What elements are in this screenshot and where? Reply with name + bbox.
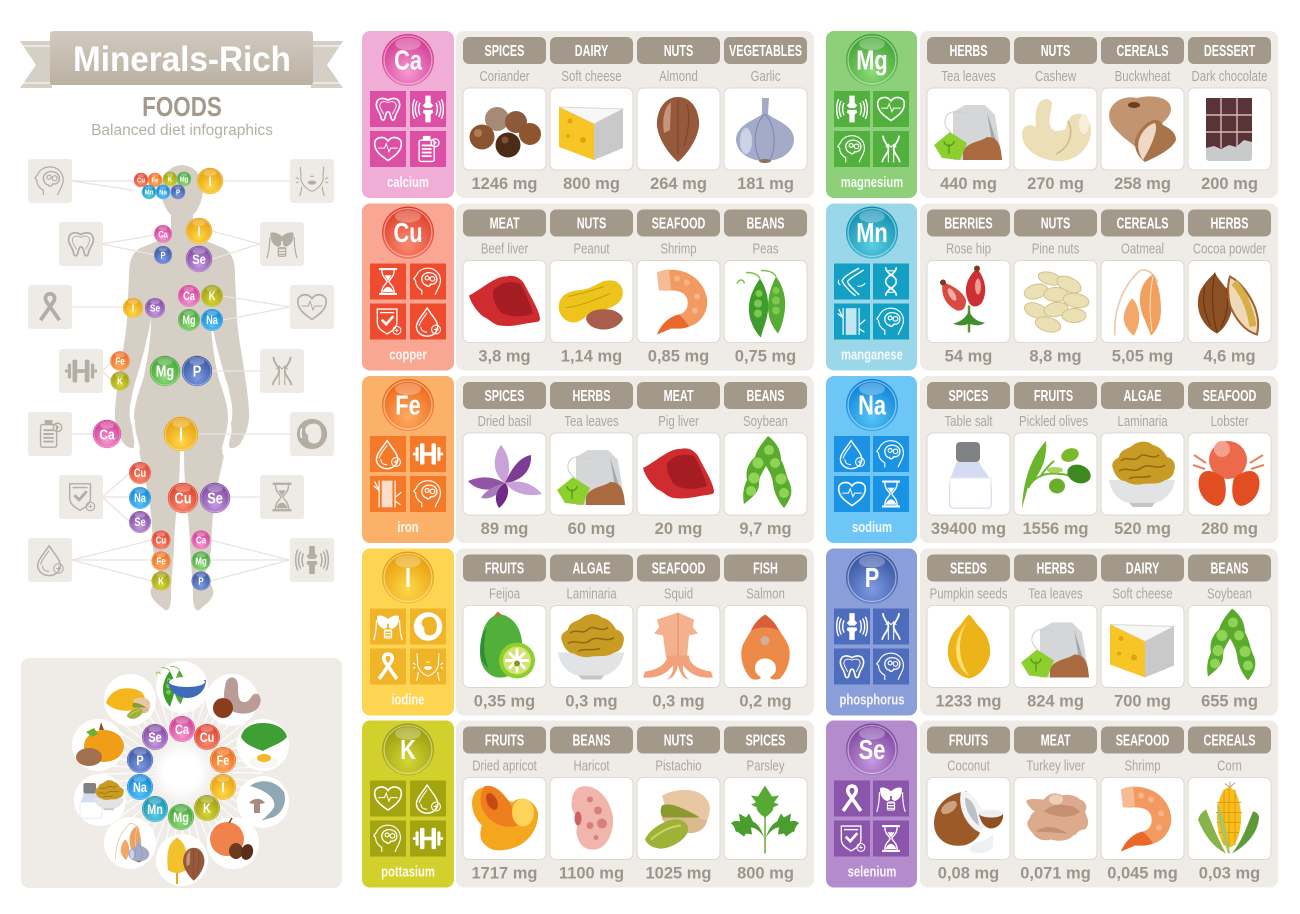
panel: potassium foods: 800 mg — [737, 864, 794, 882]
connector lines — [72, 181, 290, 581]
panel: food wheel — [21, 658, 342, 888]
panel: copper foods: SEAFOOD — [652, 214, 706, 232]
mineral balls on body: Mg — [180, 176, 188, 184]
tile: sodium: sodium — [852, 518, 892, 535]
panel: selenium foods: 0,03 mg — [1199, 864, 1260, 882]
panel: phosphorus foods: 824 mg — [1027, 692, 1084, 710]
panel: iodine foods: 0,3 mg — [565, 692, 618, 710]
wheel foods: salt and laminaria — [80, 780, 124, 819]
panel: calcium foods: 264 mg — [650, 175, 707, 193]
mineral balls on body: Cu — [134, 468, 146, 480]
panel: iron foods: 9,7 mg — [739, 520, 792, 538]
tile: potassium: K — [400, 736, 416, 766]
panel: sodium foods: SPICES — [949, 387, 988, 405]
mineral balls on body: Fe — [156, 556, 166, 567]
mineral balls on body: Se — [207, 490, 223, 508]
panel: sodium foods: 280 mg — [1201, 520, 1258, 538]
mineral balls on body: P — [176, 189, 180, 197]
panel: sodium foods: SEAFOOD — [1203, 387, 1257, 405]
mineral balls on body: Mg — [182, 315, 196, 327]
wheel minerals: Cu — [200, 730, 214, 745]
panel: potassium foods: Parsley — [747, 757, 785, 774]
panel: selenium foods: SEAFOOD — [1116, 731, 1170, 749]
panel: potassium foods: BEANS — [572, 731, 611, 749]
panel: potassium foods: 1100 mg — [559, 864, 624, 882]
panel: sodium foods: Lobster — [1211, 412, 1249, 429]
benefit icons around body — [28, 159, 334, 582]
panel: calcium foods: 1246 mg — [471, 175, 538, 193]
wheel foods: cheese and pistachio — [106, 688, 150, 719]
wheel minerals: Mn — [147, 802, 163, 817]
panel: calcium foods: NUTS — [664, 42, 693, 60]
mineral balls on body: Mg — [195, 556, 207, 567]
tile: iodine — [362, 548, 454, 716]
tile: sodium: Na — [858, 391, 886, 421]
panel: manganese foods: BERRIES — [944, 214, 993, 232]
mineral balls on body: Fe — [115, 356, 125, 367]
tile: potassium: pottasium — [381, 863, 435, 880]
panel: selenium foods: Shrimp — [1124, 757, 1161, 774]
mineral balls on body: Na — [159, 189, 167, 197]
body silhouette — [115, 165, 249, 610]
panel: iodine foods: FRUITS — [485, 559, 524, 577]
panel: magnesium foods: HERBS — [949, 42, 988, 60]
panel: phosphorus foods — [920, 548, 1278, 716]
panel: calcium foods: Coriander — [480, 67, 530, 84]
mineral balls on body: K — [209, 291, 216, 303]
wheel minerals: P — [136, 753, 144, 768]
wheel foods: peach and coffee — [210, 818, 255, 861]
panel: manganese foods: 5,05 mg — [1112, 348, 1173, 366]
tile: potassium — [362, 720, 454, 888]
panel: calcium foods: VEGETABLES — [729, 42, 802, 60]
panel: magnesium foods: Tea leaves — [941, 67, 996, 84]
panel: phosphorus foods: 700 mg — [1114, 692, 1171, 710]
mineral balls on body: Na — [206, 315, 218, 327]
panel: copper foods: 0,75 mg — [735, 348, 796, 366]
heading: foods: FOODS — [142, 92, 222, 123]
mineral balls on body: Se — [150, 303, 160, 315]
mineral balls on body: Fe — [152, 177, 159, 185]
wheel minerals: K — [203, 801, 211, 816]
tile: calcium: Ca — [394, 46, 422, 76]
panel: iron foods: 60 mg — [568, 520, 615, 538]
mineral balls on body: K — [158, 576, 164, 587]
tile: iron: iron — [397, 518, 419, 535]
panel: selenium foods: Coconut — [947, 757, 990, 774]
panel: copper foods: Shrimp — [660, 240, 697, 257]
panel: magnesium foods: 270 mg — [1027, 175, 1084, 193]
panel: copper foods: 1,14 mg — [561, 348, 622, 366]
mineral balls on body: Ca — [196, 535, 207, 546]
panel: manganese foods: 54 mg — [945, 348, 992, 366]
tile: copper: Cu — [393, 219, 423, 249]
wheel foods: pumpkin and walnut — [76, 722, 124, 766]
wheel minerals: Mg — [173, 810, 189, 825]
panel: phosphorus foods: SEEDS — [950, 559, 987, 577]
panel: iodine foods: FISH — [753, 559, 778, 577]
wheel minerals: Se — [148, 730, 162, 745]
panel: copper foods: 3,8 mg — [478, 348, 531, 366]
panel: potassium foods: Haricot — [573, 757, 610, 774]
wheel minerals: I — [221, 780, 225, 795]
mineral balls on body — [93, 168, 230, 591]
tile: selenium: selenium — [848, 863, 896, 880]
panel: magnesium foods: Buckwheat — [1115, 67, 1171, 84]
panel: calcium foods: Garlic — [751, 67, 781, 84]
panel: copper foods: MEAT — [490, 214, 520, 232]
panel: iodine foods: Feijoa — [489, 585, 521, 602]
tile: magnesium — [826, 31, 917, 198]
wheel foods: peas and rice — [156, 666, 206, 707]
panel: manganese foods: Cocoa powder — [1193, 240, 1267, 257]
panel: potassium foods — [456, 720, 814, 888]
panel: iodine foods — [456, 548, 814, 716]
panel: iodine foods: SEAFOOD — [652, 559, 706, 577]
panel: iodine foods: Salmon — [746, 585, 785, 602]
panel: potassium foods: Dried apricot — [472, 757, 537, 774]
panel: potassium foods: FRUITS — [485, 731, 524, 749]
panel: iodine foods: Squid — [664, 585, 693, 602]
tile: manganese: Mn — [856, 219, 888, 249]
panel: iron foods: MEAT — [664, 387, 694, 405]
panel: copper foods: Peas — [753, 240, 779, 257]
tile: calcium — [362, 31, 454, 198]
tile: iron: Fe — [395, 391, 421, 421]
panel: iron foods: Soybean — [743, 412, 788, 429]
tile: phosphorus: P — [865, 564, 879, 594]
panel: phosphorus foods: Soft cheese — [1112, 585, 1173, 602]
panel: phosphorus foods: 1233 mg — [935, 692, 1002, 710]
panel: iodine foods: ALGAE — [572, 559, 611, 577]
panel: manganese foods: NUTS — [1041, 214, 1070, 232]
panel: manganese foods: 4,6 mg — [1203, 348, 1256, 366]
panel: manganese foods: Oatmeal — [1121, 240, 1164, 257]
tile: sodium — [826, 376, 917, 543]
tile: phosphorus — [826, 548, 917, 716]
panel: iron foods — [456, 376, 814, 543]
panel: sodium foods: Laminaria — [1118, 412, 1168, 429]
tile: iodine: iodine — [391, 691, 425, 708]
mineral balls on body: P — [161, 249, 166, 261]
subtitle: Balanced diet infographics — [91, 122, 273, 139]
panel: selenium foods: Corn — [1217, 757, 1242, 774]
panel: iodine foods: 0,3 mg — [652, 692, 705, 710]
panel: iron foods: HERBS — [572, 387, 611, 405]
mineral balls on body: Ca — [183, 291, 195, 303]
panel: copper foods: Beef liver — [481, 240, 529, 257]
title text: Minerals-Rich — [73, 40, 291, 79]
mineral balls on body: I — [179, 425, 183, 445]
panel: phosphorus foods: HERBS — [1036, 559, 1075, 577]
panel: sodium foods: FRUITS — [1034, 387, 1073, 405]
wheel minerals: Fe — [217, 753, 229, 768]
mineral balls on body: Se — [192, 252, 206, 267]
panel: selenium foods — [920, 720, 1278, 888]
panel: selenium foods: 0,08 mg — [938, 864, 999, 882]
panel: potassium foods: Pistachio — [655, 757, 702, 774]
panel: sodium foods: Pickled olives — [1019, 412, 1088, 429]
tile: manganese: manganese — [841, 346, 903, 363]
panel: sodium foods — [920, 376, 1278, 543]
panel: calcium foods: SPICES — [485, 42, 524, 60]
mineral balls on body: Cu — [174, 490, 192, 508]
panel: manganese foods: Rose hip — [946, 240, 991, 257]
panel: magnesium foods: 440 mg — [940, 175, 997, 193]
panel: iron foods: Tea leaves — [564, 412, 619, 429]
mineral balls on body: Mn — [145, 189, 153, 197]
mineral balls on body: Ca — [99, 426, 115, 443]
panel: copper foods — [456, 204, 814, 370]
panel: phosphorus foods: DAIRY — [1126, 559, 1159, 577]
panel: iron foods: Pig liver — [658, 412, 699, 429]
panel: phosphorus foods: BEANS — [1210, 559, 1249, 577]
tile: calcium: calcium — [387, 173, 429, 190]
panel: manganese foods: 8,8 mg — [1029, 348, 1082, 366]
wheel foods: spinach and egg — [241, 723, 287, 768]
panel: copper foods: NUTS — [577, 214, 606, 232]
wheel minerals: Na — [133, 780, 147, 795]
panel: magnesium foods: 258 mg — [1114, 175, 1171, 193]
panel: manganese foods: Pine nuts — [1032, 240, 1080, 257]
panel: iodine foods: Laminaria — [567, 585, 617, 602]
panel: magnesium foods: CEREALS — [1117, 42, 1168, 60]
panel: calcium foods: 181 mg — [737, 175, 794, 193]
panel: manganese foods: HERBS — [1210, 214, 1249, 232]
tile: magnesium: Mg — [856, 46, 888, 76]
panel: iron foods: 20 mg — [655, 520, 702, 538]
mineral balls on body: P — [193, 363, 202, 381]
mineral balls on body: K — [117, 376, 123, 387]
mineral balls on body: Mg — [156, 363, 174, 381]
panel: sodium foods: 520 mg — [1114, 520, 1171, 538]
title ribbon — [20, 31, 343, 88]
mineral balls on body: I — [208, 174, 212, 189]
tile: manganese — [826, 204, 917, 370]
tile: phosphorus: phosphorus — [840, 691, 904, 708]
mineral balls on body: Cu — [156, 535, 166, 546]
panel: calcium foods: 800 mg — [563, 175, 620, 193]
panel: iron foods: BEANS — [746, 387, 785, 405]
panel: phosphorus foods: 655 mg — [1201, 692, 1258, 710]
panel: phosphorus foods: Pumpkin seeds — [930, 585, 1008, 602]
mineral balls on body: Ca — [158, 228, 168, 240]
wheel foods: wheat and almond — [167, 838, 204, 884]
panel: copper foods: BEANS — [746, 214, 785, 232]
tile: copper — [362, 204, 454, 370]
panel: potassium foods: 1717 mg — [471, 864, 538, 882]
panel: manganese foods — [920, 204, 1278, 370]
panel: sodium foods: ALGAE — [1123, 387, 1162, 405]
panel: potassium foods: 1025 mg — [645, 864, 712, 882]
panel: magnesium foods: 200 mg — [1201, 175, 1258, 193]
mineral balls on body: Na — [134, 493, 146, 505]
tile: selenium: Se — [859, 736, 885, 766]
panel: selenium foods: MEAT — [1041, 731, 1071, 749]
panel: potassium foods: NUTS — [664, 731, 693, 749]
panel: selenium foods: Turkey liver — [1026, 757, 1085, 774]
panel: calcium foods: Soft cheese — [561, 67, 622, 84]
mineral balls on body: P — [198, 576, 204, 587]
panel: copper foods: 0,85 mg — [648, 348, 709, 366]
mineral balls on body: Se — [134, 517, 146, 529]
wheel foods: fish and mushroom — [249, 781, 285, 821]
panel: calcium foods — [456, 31, 814, 198]
wheel minerals: Ca — [175, 722, 189, 737]
panel: manganese foods: CEREALS — [1117, 214, 1168, 232]
wheel minerals — [127, 716, 236, 830]
panel: iron foods: Dried basil — [478, 412, 531, 429]
mineral balls on body: Cu — [137, 177, 145, 185]
panel: selenium foods: FRUITS — [949, 731, 988, 749]
panel: selenium foods: 0,045 mg — [1107, 864, 1178, 882]
panel: potassium foods: SPICES — [746, 731, 785, 749]
panel: copper foods: Peanut — [573, 240, 610, 257]
panel: iron foods: 89 mg — [481, 520, 528, 538]
panel: selenium foods: CEREALS — [1204, 731, 1255, 749]
tile: selenium — [826, 720, 917, 888]
wheel foods: hazelnut and snail — [213, 677, 261, 718]
panel: calcium foods: DAIRY — [575, 42, 608, 60]
panel: magnesium foods: Dark chocolate — [1192, 67, 1267, 84]
panel: magnesium foods — [920, 31, 1278, 198]
panel: iodine foods: 0,35 mg — [474, 692, 535, 710]
panel: selenium foods: 0,071 mg — [1020, 864, 1091, 882]
wheel foods: oat and garlic — [116, 823, 149, 862]
panel: phosphorus foods: Soybean — [1207, 585, 1252, 602]
mineral balls on body: K — [168, 176, 172, 184]
panel: sodium foods: 39400 mg — [931, 520, 1006, 538]
panel: sodium foods: Table salt — [944, 412, 993, 429]
tile: iodine: I — [405, 564, 411, 594]
panel: phosphorus foods: Tea leaves — [1028, 585, 1083, 602]
panel: magnesium foods: NUTS — [1041, 42, 1070, 60]
tile: copper: copper — [389, 346, 427, 363]
panel: magnesium foods: Cashew — [1035, 67, 1076, 84]
panel: iron foods: SPICES — [485, 387, 524, 405]
tile: iron — [362, 376, 454, 543]
panel: sodium foods: 1556 mg — [1022, 520, 1089, 538]
panel: iodine foods: 0,2 mg — [739, 692, 792, 710]
panel: calcium foods: Almond — [659, 67, 698, 84]
mineral balls on body: I — [132, 303, 134, 315]
panel: magnesium foods: DESSERT — [1204, 42, 1256, 60]
tile: magnesium: magnesium — [841, 173, 903, 190]
mineral balls on body: I — [197, 224, 201, 239]
